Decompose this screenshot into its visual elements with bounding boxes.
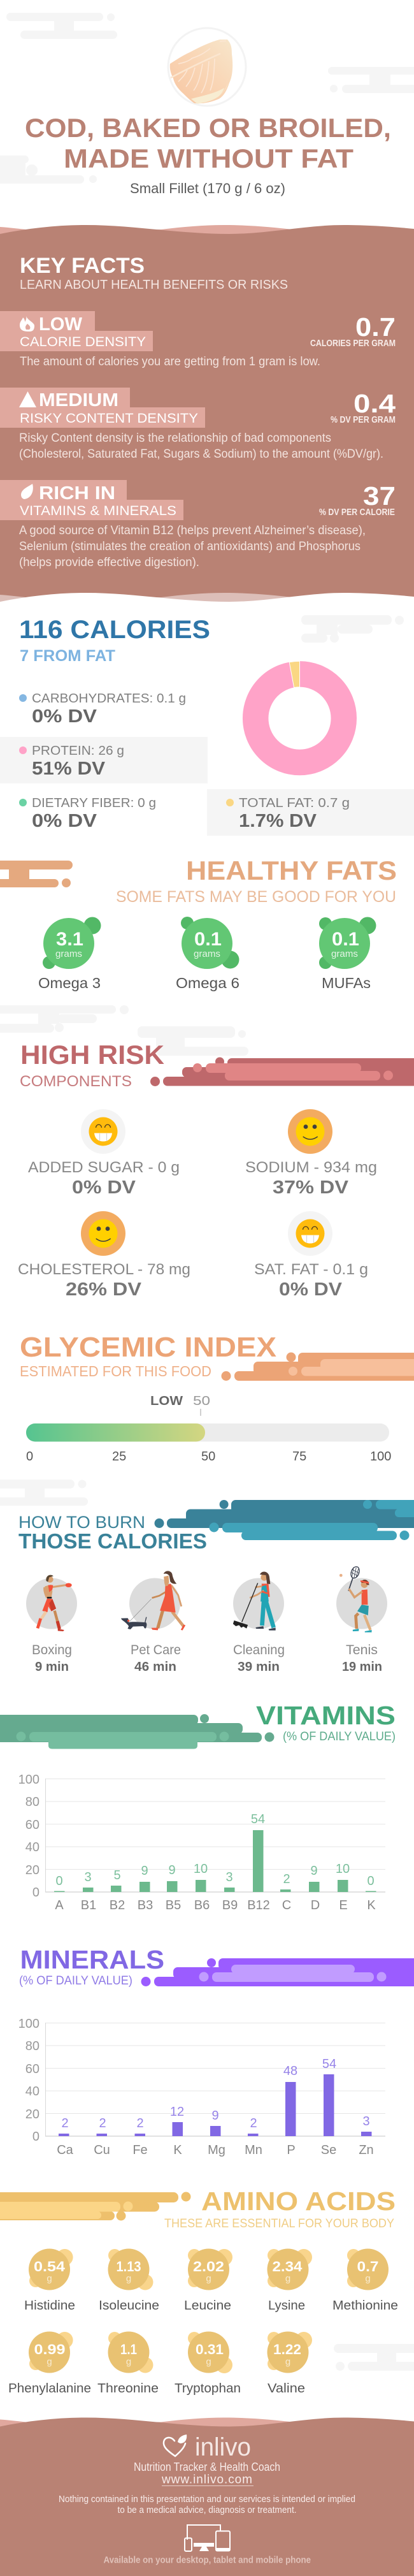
bar chart: minerals: 2 — [250, 2116, 257, 2130]
stat: histidine: g — [46, 2273, 52, 2284]
bar chart: minerals: K — [173, 2143, 182, 2157]
bar chart: minerals: 2 — [99, 2116, 106, 2130]
bar chart: minerals — [18, 2017, 385, 2157]
heading: amino acids — [164, 2187, 396, 2230]
legend: dietary fiber: 0% DV — [32, 811, 97, 831]
stat: tryptophan: Tryptophan — [175, 2382, 241, 2396]
legend: carbohydrates — [19, 692, 186, 727]
heading: vitamins: (% OF DAILY VALUE) — [283, 1730, 396, 1743]
heading: amino acids: AMINO ACIDS — [201, 2187, 396, 2216]
bar chart: vitamins: B2 — [110, 1898, 125, 1912]
stat: isoleucine: Isoleucine — [99, 2299, 159, 2313]
panel: glycemic index — [20, 1332, 414, 1464]
heading: vitamins: VITAMINS — [256, 1701, 396, 1730]
item: cholesterol: CHOLESTEROL - 78 mg — [18, 1261, 190, 1278]
heading: healthy fats: HEALTHY FATS — [186, 855, 397, 885]
bar chart: vitamins: 2 — [283, 1872, 290, 1886]
bar chart: vitamins: K — [367, 1898, 376, 1912]
bar chart: vitamins: B3 — [138, 1898, 153, 1912]
logo: inlivo — [164, 2433, 251, 2461]
fact: medium risky content density: MEDIUM — [39, 390, 118, 411]
bar chart: vitamins: 0 — [32, 1886, 39, 1900]
bar chart: vitamins: 20 — [25, 1863, 39, 1877]
heading: high risk: COMPONENTS — [20, 1073, 132, 1090]
activity: boxing — [26, 1575, 77, 1674]
item: cholesterol: 26% DV — [66, 1279, 142, 1300]
bar chart: vitamins: 0 — [367, 1874, 375, 1888]
stat: mufas — [319, 917, 376, 991]
panel: healthy fats — [0, 855, 397, 991]
bar chart: minerals: 12 — [170, 2105, 184, 2119]
bar chart: minerals: 80 — [25, 2039, 39, 2053]
stat: methionine: Methionine — [332, 2299, 398, 2313]
heading: glycemic index: GLYCEMIC INDEX — [20, 1332, 276, 1363]
stat: omega 3: 3.1 — [56, 929, 83, 950]
heading: healthy fats: SOME FATS MAY BE GOOD FOR YOU — [116, 888, 396, 906]
fact: medium risky content density: % DV PER GRAM — [331, 415, 396, 425]
bar chart: minerals: Mn — [245, 2143, 262, 2157]
fact: medium risky content density — [0, 388, 396, 461]
item: added sugar — [28, 1109, 180, 1198]
stat: methionine: g — [365, 2273, 371, 2284]
panel: how to burn calories — [18, 1500, 414, 1674]
fact: rich in vitamins and minerals: VITAMINS & MINERALS — [20, 504, 176, 518]
stat: leucine: Leucine — [184, 2299, 231, 2313]
fact: rich in vitamins and minerals: 37 — [363, 481, 396, 511]
bar chart: minerals: 48 — [283, 2064, 297, 2078]
heading: glycemic index — [20, 1332, 276, 1379]
bar chart: vitamins: B5 — [166, 1898, 181, 1912]
activity: tennis: Tenis — [346, 1643, 378, 1657]
stat: histidine: 0.54 — [34, 2259, 66, 2274]
bar chart: vitamins: 5 — [113, 1868, 121, 1882]
logo: inlivo: inlivo — [195, 2433, 251, 2461]
gauge bar: 75 — [292, 1450, 306, 1464]
banner streak — [0, 861, 73, 887]
legend: total fat: TOTAL FAT: 0.7 g — [239, 796, 350, 810]
stat: phenylalanine: Phenylalanine — [8, 2382, 91, 2396]
fact: medium risky content density: Risky Content density is the relationship of bad components — [19, 432, 331, 445]
disclaimer: Nothing contained in this presentation and our services is intended or implied — [59, 2494, 355, 2505]
stat: isoleucine: g — [126, 2273, 131, 2284]
bar chart: minerals: Cu — [94, 2143, 110, 2157]
icon: woman sweeping — [233, 1572, 276, 1631]
item: sodium — [245, 1109, 377, 1198]
bar chart: minerals: Ca — [57, 2143, 74, 2157]
legend: protein — [19, 744, 124, 779]
icon: devices — [185, 2525, 230, 2551]
bar chart: minerals: 9 — [211, 2109, 219, 2123]
item: sodium: SODIUM - 934 mg — [245, 1159, 377, 1176]
heading: how to burn those calories — [18, 1513, 207, 1553]
header: food photo and title — [25, 28, 391, 196]
icon: cod fillet in circle — [168, 28, 246, 106]
stat: lysine: 2.34 — [273, 2259, 303, 2274]
activity: tennis — [336, 1566, 387, 1674]
disclaimer: to be a medical advice, diagnosis or treatment. — [117, 2505, 297, 2515]
legend: total fat — [226, 796, 350, 831]
bar chart: vitamins: 9 — [141, 1864, 148, 1878]
stat: histidine — [24, 2249, 75, 2313]
stat: omega 6: 0.1 — [194, 929, 222, 950]
disclaimer — [59, 2494, 355, 2515]
title: COD, BAKED OR BROILED, — [25, 113, 391, 143]
icon: tennis player — [339, 1566, 372, 1633]
gauge bar: 0 — [26, 1450, 33, 1464]
stat: omega 6: Omega 6 — [176, 975, 239, 991]
stat: methionine — [332, 2249, 398, 2313]
item: saturated fat: SAT. FAT - 0.1 g — [254, 1261, 368, 1278]
bar chart: vitamins: 3 — [225, 1870, 233, 1884]
stat: mufas: 0.1 — [332, 929, 359, 950]
activity: cleaning: Cleaning — [233, 1643, 285, 1657]
heading: key facts: LEARN ABOUT HEALTH BENEFITS OR RISKS — [20, 278, 288, 292]
gauge bar: 100 — [370, 1450, 391, 1464]
heading: how to burn those calories: HOW TO BURN — [18, 1513, 145, 1532]
website link: www.inlivo.com — [161, 2473, 252, 2486]
stat: valine: 1.22 — [273, 2341, 301, 2357]
stat: omega 3 — [38, 917, 101, 991]
item: added sugar: 0% DV — [72, 1177, 136, 1198]
stat: tryptophan: 0.31 — [196, 2341, 224, 2357]
fact: low calorie density: CALORIES PER GRAM — [310, 338, 396, 349]
heading: high risk — [20, 1040, 164, 1090]
fact: rich in vitamins and minerals: RICH IN — [39, 483, 115, 504]
banner streak — [222, 1353, 414, 1381]
fact: medium risky content density: RISKY CONTENT DENSITY — [20, 411, 198, 426]
stat: histidine: Histidine — [24, 2299, 75, 2313]
stat: valine: g — [285, 2356, 290, 2368]
legend: carbohydrates: CARBOHYDRATES: 0.1 g — [32, 692, 186, 706]
banner streak — [154, 1500, 414, 1540]
stat: threonine: Threonine — [97, 2382, 159, 2396]
stat: mufas: grams — [331, 949, 358, 959]
heading: 116 calories: 116 CALORIES — [19, 616, 210, 644]
panel: calories — [0, 616, 414, 836]
bar chart: vitamins: 10 — [336, 1862, 350, 1876]
bar chart: vitamins: 100 — [18, 1773, 39, 1787]
serving size: Small Fillet (170 g / 6 oz) — [130, 180, 285, 196]
bar chart: minerals: Fe — [132, 2143, 148, 2157]
heading: how to burn those calories: THOSE CALORIES — [18, 1529, 207, 1553]
heading: minerals — [19, 1945, 164, 1988]
heading: minerals: MINERALS — [20, 1945, 164, 1974]
banner streak — [150, 1057, 414, 1086]
stat: tryptophan: g — [206, 2356, 211, 2368]
legend: dietary fiber: DIETARY FIBER: 0 g — [32, 796, 156, 810]
icon: leaf — [21, 484, 33, 499]
heading: key facts: KEY FACTS — [20, 254, 145, 278]
gauge bar: 50 — [193, 1394, 210, 1408]
activity: pet care: 46 min — [134, 1660, 176, 1674]
icon: grin face — [296, 1219, 325, 1248]
bar chart: vitamins: B9 — [222, 1898, 238, 1912]
stat: valine: Valine — [268, 2382, 305, 2396]
bar chart: minerals: Se — [321, 2143, 336, 2157]
gauge bar: 25 — [112, 1450, 126, 1464]
stat: isoleucine: 1.13 — [116, 2259, 141, 2274]
heading: glycemic index: ESTIMATED FOR THIS FOOD — [20, 1363, 211, 1379]
legend: carbohydrates: 0% DV — [32, 706, 97, 727]
panel: amino acids — [0, 2187, 398, 2396]
bar chart: vitamins: 54 — [251, 1812, 265, 1826]
title — [25, 113, 391, 173]
stat: threonine — [97, 2332, 159, 2396]
fact: rich in vitamins and minerals: (helps provide effective digestion). — [19, 556, 199, 569]
item: saturated fat — [254, 1211, 368, 1300]
bar chart: vitamins: 3 — [84, 1870, 92, 1884]
bar chart: minerals: 100 — [18, 2017, 39, 2031]
activity: cleaning — [233, 1572, 285, 1674]
fact: low calorie density — [0, 311, 396, 368]
stat: omega 6: grams — [194, 949, 220, 959]
stat: phenylalanine — [8, 2332, 91, 2396]
stat: leucine: 2.02 — [193, 2259, 224, 2274]
bar chart: minerals: P — [287, 2143, 296, 2157]
bar chart: vitamins: 9 — [168, 1863, 176, 1877]
fact: rich in vitamins and minerals: Selenium (stimulates the creation of antioxidants) and Phosphorus — [19, 540, 360, 553]
bar chart: minerals: 0 — [32, 2130, 39, 2144]
gauge bar: 50 — [201, 1450, 215, 1464]
panel: key facts — [0, 225, 414, 612]
bar chart: vitamins: 80 — [25, 1795, 39, 1809]
bar chart: vitamins: 10 — [194, 1862, 208, 1876]
bar chart: minerals: 2 — [61, 2116, 69, 2130]
bar chart: minerals: 3 — [362, 2114, 370, 2128]
item: saturated fat: 0% DV — [279, 1279, 343, 1300]
footer — [0, 2417, 414, 2576]
panel: minerals — [18, 1945, 414, 2157]
stat: tryptophan — [175, 2332, 241, 2396]
icon: smile face — [89, 1219, 117, 1248]
legend: protein: 51% DV — [32, 759, 106, 779]
bar chart: vitamins: D — [311, 1898, 320, 1912]
bar chart: minerals: 60 — [25, 2062, 39, 2076]
banner streak — [0, 2192, 191, 2221]
stat: lysine: Lysine — [268, 2299, 305, 2313]
bar chart: minerals: 20 — [25, 2107, 39, 2121]
stat: leucine: g — [206, 2273, 211, 2284]
fact: rich in vitamins and minerals: A good source of Vitamin B12 (helps prevent Alzheimer’s disease), — [19, 524, 366, 537]
activity: pet care — [121, 1571, 185, 1674]
fact: medium risky content density: 0.4 — [353, 389, 396, 418]
activity: pet care: Pet Care — [131, 1643, 181, 1657]
item: cholesterol — [18, 1211, 190, 1300]
legend: protein: PROTEIN: 26 g — [32, 744, 124, 758]
bar chart: minerals: 40 — [25, 2085, 39, 2099]
stat: omega 3: Omega 3 — [38, 975, 101, 991]
bar chart: vitamins: B6 — [194, 1898, 210, 1912]
gauge bar: LOW — [150, 1394, 183, 1408]
stat: lysine: g — [285, 2273, 290, 2284]
stat: threonine: 1.1 — [120, 2341, 137, 2357]
tagline: Nutrition Tracker & Health Coach — [134, 2461, 280, 2473]
item: sodium: 37% DV — [273, 1177, 349, 1198]
icon: smile face — [296, 1117, 325, 1146]
bar chart: vitamins: 40 — [25, 1840, 39, 1854]
fact: medium risky content density: (Cholesterol, Saturated Fat, Sugars & Sodium) to the amount (%DV/gr). — [19, 448, 383, 461]
bar chart: vitamins: E — [339, 1898, 348, 1912]
fact: low calorie density: LOW — [39, 314, 83, 335]
gauge bar — [26, 1394, 391, 1464]
heading: 116 calories — [19, 616, 210, 665]
bar chart: vitamins: A — [55, 1898, 64, 1912]
bar chart: minerals: 2 — [136, 2116, 144, 2130]
legend: dietary fiber — [19, 796, 156, 831]
fact: low calorie density: 0.7 — [355, 312, 396, 342]
bar chart: minerals: 54 — [322, 2057, 336, 2071]
icon: flame — [20, 316, 34, 331]
stat: mufas: MUFAs — [322, 975, 371, 991]
activity: cleaning: 39 min — [238, 1660, 280, 1674]
icon: woman walking dog — [121, 1571, 185, 1631]
stat: lysine — [268, 2249, 312, 2313]
stat: methionine: 0.7 — [357, 2259, 378, 2274]
activity: tennis: 19 min — [342, 1660, 382, 1674]
item: added sugar: ADDED SUGAR - 0 g — [28, 1159, 180, 1176]
bar chart: vitamins: B12 — [247, 1898, 270, 1912]
stat: valine — [268, 2332, 312, 2396]
stat: phenylalanine: 0.99 — [34, 2341, 65, 2357]
stat: isoleucine — [99, 2249, 159, 2313]
heading: healthy fats — [116, 855, 397, 906]
heading: high risk: HIGH RISK — [20, 1040, 164, 1070]
title: MADE WITHOUT FAT — [64, 143, 353, 173]
stat: omega 6 — [176, 917, 239, 991]
legend: total fat: 1.7% DV — [239, 811, 317, 831]
stat: leucine — [184, 2249, 232, 2313]
activity: boxing: 9 min — [35, 1660, 69, 1674]
bar chart: vitamins: 60 — [25, 1818, 39, 1832]
icon: grin face — [89, 1117, 117, 1146]
icon: warning triangle — [19, 391, 36, 407]
bar chart: vitamins: 0 — [55, 1874, 63, 1888]
heading: vitamins — [256, 1701, 396, 1743]
bar chart: minerals: Mg — [208, 2143, 225, 2157]
availability note: Available on your desktop, tablet and mobile phone — [103, 2555, 311, 2565]
fact: rich in vitamins and minerals: % DV PER CALORIE — [319, 507, 395, 518]
bar chart: vitamins: C — [282, 1898, 291, 1912]
heading: amino acids: THESE ARE ESSENTIAL FOR YOUR BODY — [164, 2216, 394, 2230]
activity: boxing: Boxing — [32, 1643, 72, 1657]
panel: vitamins — [0, 1701, 396, 1912]
bar chart: vitamins: B1 — [81, 1898, 96, 1912]
bar chart: vitamins: 9 — [310, 1864, 318, 1878]
fact: low calorie density: CALORIE DENSITY — [20, 335, 146, 349]
heading: 116 calories: 7 FROM FAT — [20, 647, 115, 665]
panel: high risk components — [18, 1040, 414, 1300]
heading: key facts — [20, 254, 288, 292]
banner streak — [141, 1958, 414, 1986]
fact: rich in vitamins and minerals — [0, 480, 396, 569]
stat: omega 3: grams — [55, 949, 82, 959]
icon: boxer — [38, 1575, 72, 1631]
donut chart — [255, 661, 344, 762]
stat: threonine: g — [126, 2356, 131, 2368]
bar chart: vitamins — [18, 1773, 385, 1912]
stat: phenylalanine: g — [46, 2356, 52, 2368]
bar chart: minerals: Zn — [359, 2143, 374, 2157]
banner streak — [0, 1714, 274, 1749]
heading: minerals: (% OF DAILY VALUE) — [19, 1974, 132, 1988]
fact: low calorie density: The amount of calories you are getting from 1 gram is low. — [20, 355, 320, 368]
